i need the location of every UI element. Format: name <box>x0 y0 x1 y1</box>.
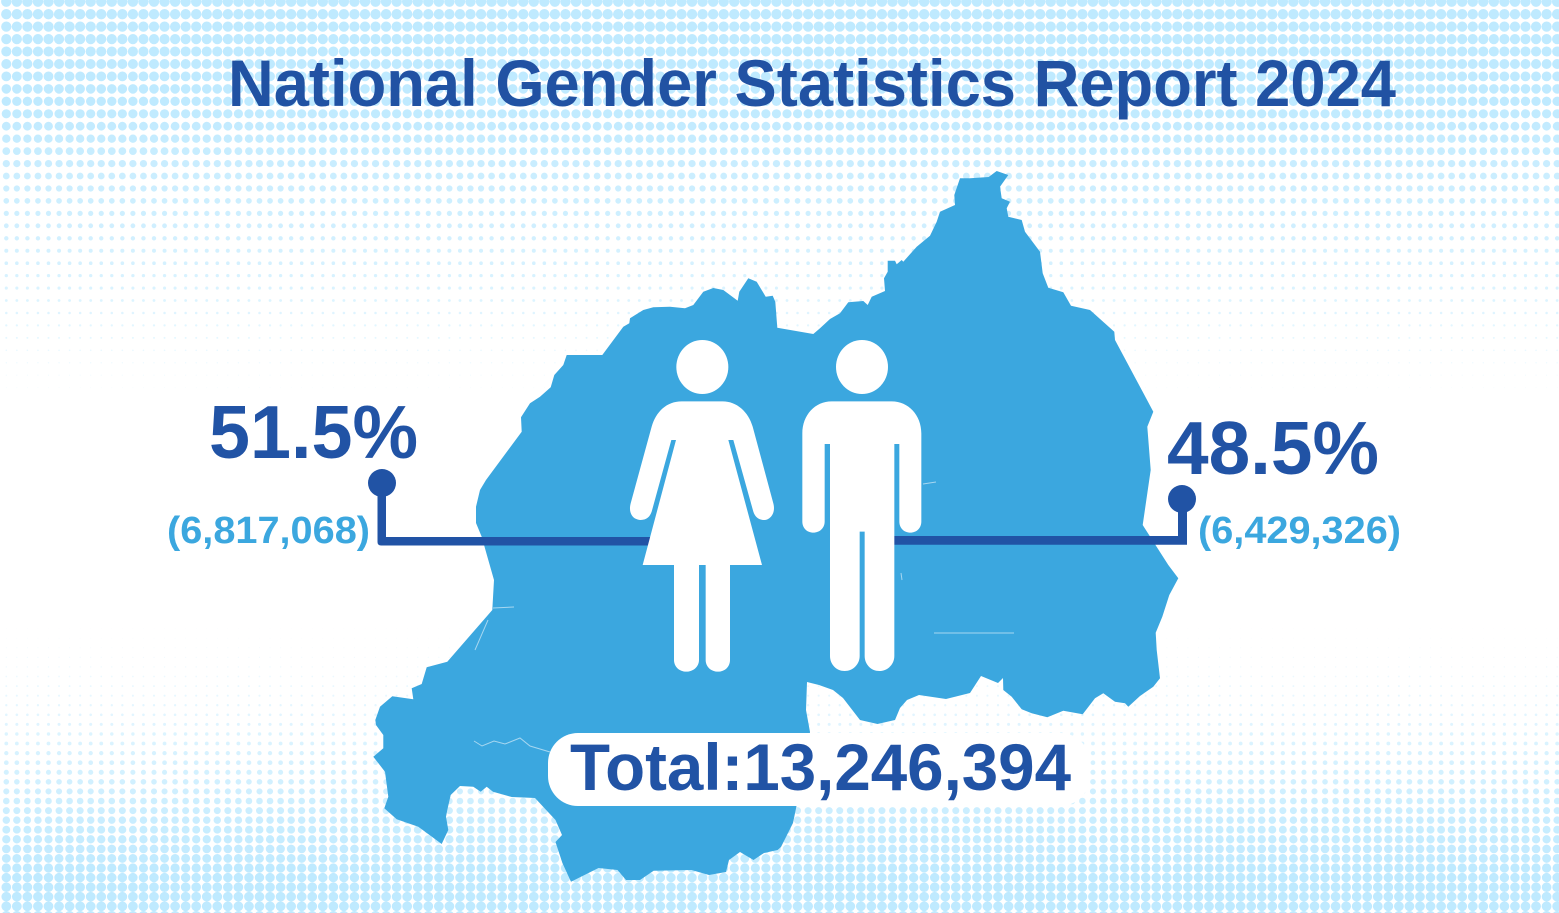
female count: (6,817,068) <box>167 510 370 552</box>
male count: (6,429,326) <box>1198 510 1401 552</box>
icon: man <box>802 340 921 671</box>
title: National Gender Statistics Report 2024 <box>228 46 1396 120</box>
icon: woman <box>630 340 774 672</box>
male percentage: 48.5% <box>1167 406 1379 490</box>
right connector <box>880 485 1196 545</box>
female percentage: 51.5% <box>209 390 418 474</box>
left connector <box>368 469 660 546</box>
total callout: Total:13,246,394 <box>570 730 1071 804</box>
map of Rwanda <box>373 171 1178 882</box>
